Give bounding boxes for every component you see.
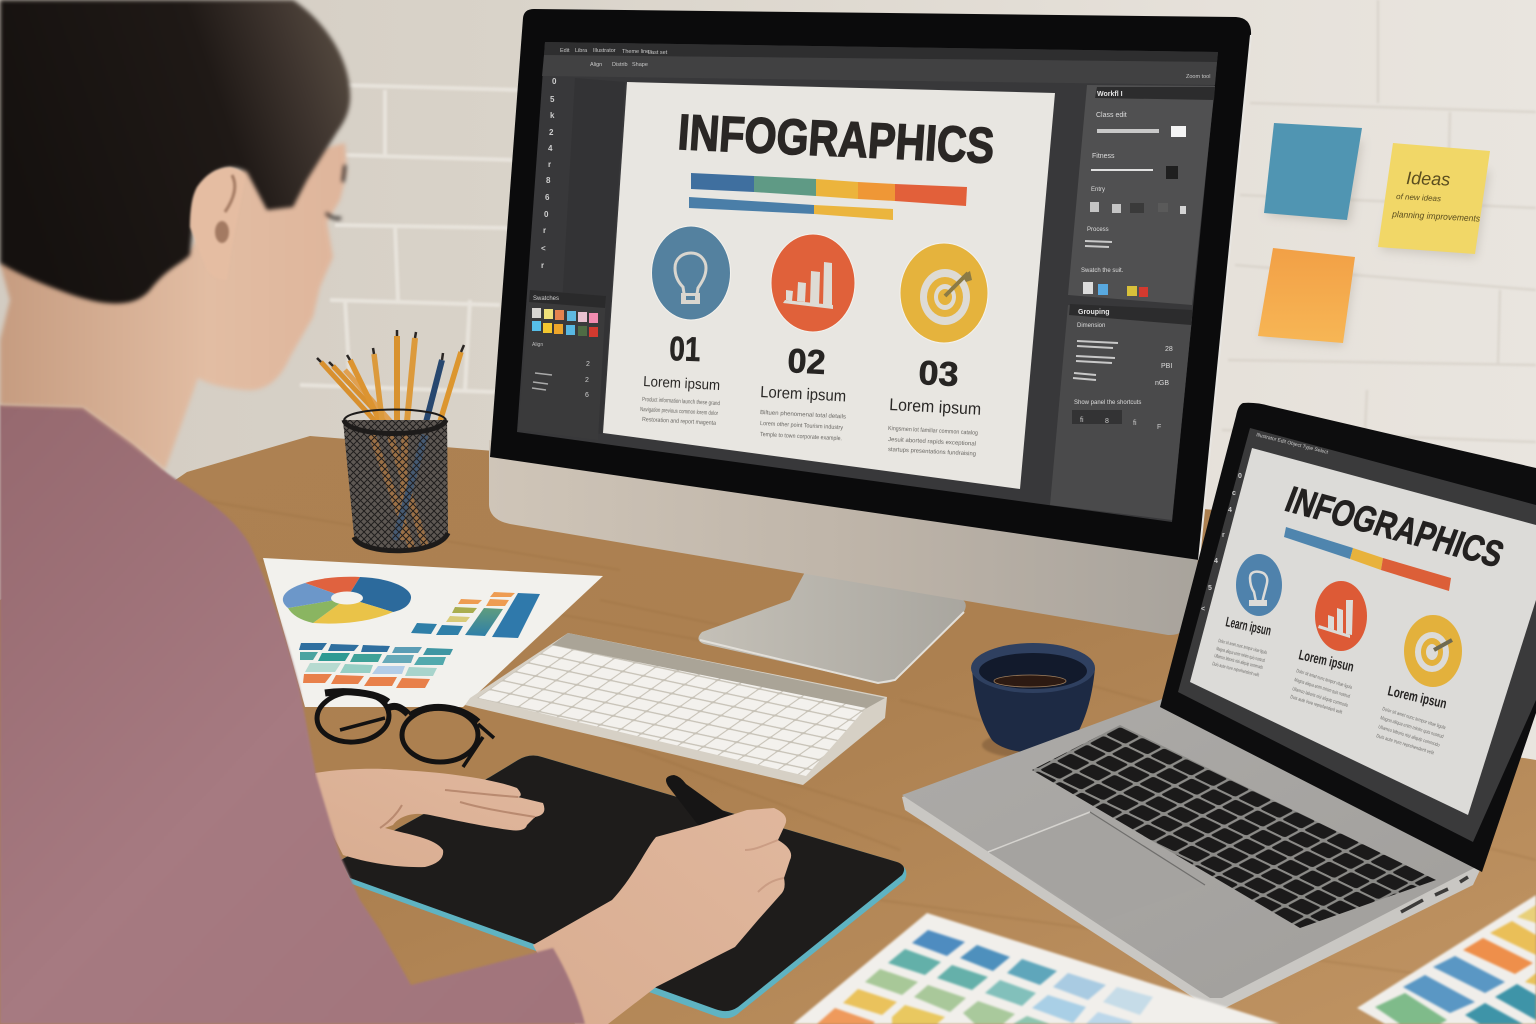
- left toolbar glyphs: 0: [552, 77, 557, 86]
- right properties panel: nGB: [1155, 380, 1169, 387]
- right properties panel: F: [1157, 424, 1161, 431]
- step numbers: 01: [669, 330, 701, 369]
- laptop body text: Dolor sit amet nunc tempor vitae ligula: [1218, 638, 1268, 656]
- sticky note: orange: [1258, 248, 1355, 346]
- pencils: [317, 330, 464, 432]
- laptop lorem headings: Lorem ipsun: [1386, 682, 1448, 711]
- laptop body text: Magna aliqua enim minim quis nostrud: [1216, 646, 1266, 664]
- monitor black bezel: [490, 9, 1251, 560]
- laptop: 4: [1214, 558, 1218, 565]
- menu text: Zoom tool: [1186, 74, 1210, 80]
- swatch panel: 2: [585, 377, 589, 384]
- desktop monitor: [489, 9, 1251, 635]
- swatch panel: Align: [532, 342, 543, 348]
- pencil holder with pencils: [317, 330, 464, 551]
- laptop body text: Duis aute irure reprehenderit velit: [1212, 661, 1260, 679]
- laptop base: [902, 698, 1480, 1008]
- pie chart: [283, 577, 411, 624]
- right properties panel: fi: [1133, 420, 1137, 427]
- menu text: [560, 48, 1210, 80]
- laptop: <: [1201, 606, 1205, 613]
- right properties panel: 8: [1105, 418, 1109, 425]
- step numbers: [669, 330, 960, 394]
- sticky note: yellow ideas: of new ideas: [1396, 192, 1441, 203]
- stylus: [666, 775, 729, 834]
- sticky note: blue: [1264, 123, 1362, 223]
- colour table on paper: [299, 643, 453, 688]
- lorem body text: startups presentations fundraising: [888, 447, 976, 458]
- left toolbar glyphs: r: [543, 226, 546, 235]
- icon: target circle: [900, 243, 988, 343]
- menu text: Align: [590, 62, 602, 68]
- drawing tablet: [341, 756, 906, 1018]
- laptop icon: bulb: [1236, 554, 1282, 616]
- lorem headings: Lorem ipsum: [643, 374, 721, 394]
- silver keyboard: [465, 633, 887, 785]
- laptop body text: Ullamco laboris nisi aliquip commodo: [1214, 653, 1264, 671]
- menu text: Last set: [648, 50, 668, 56]
- laptop lorem headings: Lorem ipsun: [1297, 646, 1355, 675]
- left toolbar glyphs: r: [548, 160, 551, 169]
- left toolbar glyphs: 4: [548, 144, 553, 153]
- right properties panel: [1050, 85, 1215, 520]
- person: ear: [190, 167, 245, 280]
- paper with charts: [263, 558, 603, 707]
- icon: lightbulb circle: [652, 226, 730, 320]
- bottom swatch sheet: [793, 913, 1280, 1024]
- laptop ports: [1401, 877, 1468, 912]
- menu text: Libra: [575, 48, 588, 54]
- laptop: 0: [1238, 473, 1242, 480]
- coffee cup: [971, 643, 1095, 758]
- laptop lorem headings: [1224, 613, 1448, 711]
- lorem body text: Kingsmen lot familiar common catalog: [888, 426, 978, 437]
- laptop: c: [1232, 490, 1236, 497]
- poster colour bar top: [691, 173, 967, 206]
- right properties panel: Process: [1087, 227, 1109, 233]
- laptop lid: [1160, 403, 1536, 872]
- laptop screen: [1178, 428, 1536, 842]
- step numbers: 03: [918, 354, 960, 394]
- trackpad: [988, 812, 1205, 922]
- left toolbar glyphs: [541, 77, 557, 270]
- right properties panel: PBI: [1161, 363, 1172, 370]
- bar chart on paper: [411, 592, 540, 638]
- left toolbar glyphs: 2: [549, 128, 554, 137]
- infographic poster on monitor: [603, 82, 1055, 489]
- lorem body text: Biltuen phenomenal total details: [760, 410, 846, 420]
- laptop colour bar: [1284, 527, 1451, 591]
- left toolbar glyphs: 8: [546, 176, 551, 185]
- laptop body text: Magna aliqua enim minim quis nostrud: [1293, 677, 1351, 700]
- menu text: Distrib: [612, 62, 628, 68]
- laptop body text: Duis aute irure reprehenderit velit: [1375, 733, 1435, 757]
- laptop: 5: [1208, 585, 1212, 592]
- left toolbar glyphs: 5: [550, 95, 555, 104]
- menu text: Edit: [560, 48, 570, 54]
- laptop body text: Duis aute irure reprehenderit velit: [1289, 694, 1343, 716]
- sticky note: yellow ideas: [1378, 143, 1490, 258]
- lorem body text: Restoration and report magenta: [642, 417, 717, 427]
- poster colour bar bottom: [689, 197, 893, 220]
- sticky note: yellow ideas: Ideas: [1406, 168, 1451, 190]
- laptop: [902, 403, 1536, 1008]
- menu text: Illustrator: [593, 48, 616, 54]
- lorem headings: Lorem ipsum: [889, 395, 982, 419]
- right properties panel: Show panel the shortcuts: [1074, 400, 1141, 406]
- laptop: 4: [1228, 507, 1232, 514]
- editor interface: [517, 42, 1218, 522]
- lorem body text: Lorem other point Tourism industry: [760, 421, 843, 431]
- lorem body text: Jesuit aborted rapids exceptional: [888, 437, 976, 448]
- person: hair: [0, 0, 350, 304]
- swatch panel: Swatches: [533, 296, 559, 302]
- right properties panel: fi: [1080, 417, 1084, 424]
- step numbers: 02: [787, 342, 827, 382]
- menu text: Theme lines: [622, 49, 652, 55]
- laptop body text: Ullamco laboris nisi aliquip commodo: [1377, 724, 1441, 749]
- left toolbar glyphs: 0: [544, 210, 549, 219]
- laptop body text: Magna aliqua enim minim quis nostrud: [1379, 715, 1444, 740]
- right hand and forearm: [533, 808, 791, 1024]
- right swatch sheet: [1357, 895, 1536, 1024]
- swatch panel: 2: [586, 361, 590, 368]
- sticky note: yellow ideas: planning improvements: [1391, 209, 1481, 224]
- laptop body text: Dolor sit amet nunc tempor vitae ligula: [1381, 706, 1446, 731]
- laptop body text: Dolor sit amet nunc tempor vitae ligula: [1295, 668, 1353, 691]
- lorem headings: Lorem ipsum: [760, 384, 847, 405]
- right properties panel: 28: [1165, 346, 1173, 353]
- laptop body text: [1212, 638, 1446, 757]
- right properties panel: Fitness: [1092, 153, 1115, 160]
- lorem headings: [643, 374, 982, 419]
- monitor stand: [698, 572, 966, 683]
- monitor chin: [489, 440, 1200, 635]
- left hand on tablet: [315, 769, 544, 867]
- laptop: r: [1222, 532, 1225, 539]
- right properties panel: Dimension: [1077, 323, 1105, 329]
- swatch panel: 6: [585, 392, 589, 399]
- lorem body text: Temple to town corporate example.: [760, 432, 842, 442]
- laptop toolbar text: Illustrator Edit Object Type Select: [1256, 432, 1329, 456]
- laptop body text: Ullamco laboris nisi aliquip commodo: [1291, 686, 1349, 709]
- lorem body text: [640, 397, 978, 458]
- poster title: INFOGRAPHICS: [676, 104, 996, 174]
- right properties panel: Class edit: [1096, 112, 1127, 119]
- icon: bar chart circle: [771, 234, 855, 332]
- lorem body text: Navigation previous common lorem dolor: [640, 407, 718, 417]
- laptop keyboard: [1032, 725, 1436, 928]
- laptop lorem headings: Learn ipsun: [1224, 613, 1273, 638]
- person: neck and face: [0, 143, 347, 470]
- laptop icon: target: [1404, 615, 1462, 687]
- right properties panel: Entry: [1091, 187, 1105, 193]
- left toolbar glyphs: k: [550, 111, 555, 120]
- right properties panel: Swatch the suit.: [1081, 268, 1124, 274]
- right properties panel: Workfl I: [1097, 91, 1123, 98]
- left toolbar glyphs: 6: [545, 193, 550, 202]
- left toolbar glyphs: <: [541, 244, 546, 253]
- lorem body text: Product information launch these grand: [642, 397, 720, 407]
- laptop icon: bars: [1315, 581, 1367, 651]
- menu text: Shape: [632, 62, 648, 68]
- person: sweater: [0, 405, 585, 1024]
- left toolbar glyphs: r: [541, 261, 544, 270]
- wooden desk: [0, 436, 1536, 1024]
- glasses: [315, 690, 494, 767]
- right properties panel: Grouping: [1078, 309, 1110, 316]
- swatch panel: [518, 290, 606, 440]
